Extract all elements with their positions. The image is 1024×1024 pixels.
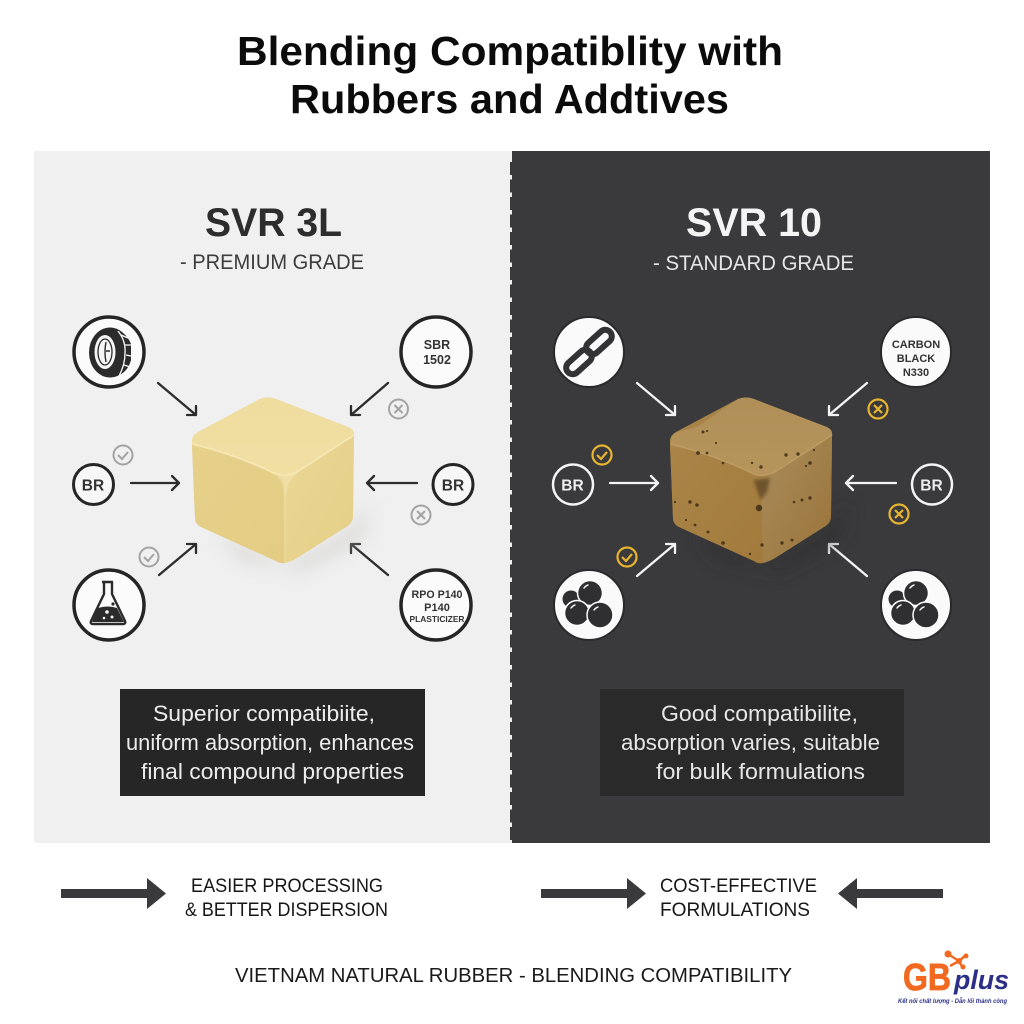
icon: BR circle incompatible: BR [920,478,943,494]
icon: RPO P140 plasticizer: P140 [424,602,450,614]
subheading: standard grade: - STANDARD GRADE [653,252,854,275]
logo: GBplus [898,950,1009,1005]
icon: filler beads right [881,570,951,640]
rubber cube: pale yellow [192,398,372,572]
text box: standard summary: absorption varies, suitable [621,730,880,755]
panel: SVR 3L premium grade [34,151,512,843]
icon: RPO P140 plasticizer: RPO P140 [412,589,462,601]
icon: carbon black N330 [881,317,951,387]
panel: SVR 10 standard grade [512,151,990,843]
icon: BR circle incompatible [912,464,952,504]
text: easier processing: EASIER PROCESSING [191,875,383,897]
text box: standard summary: Good compatibilite, [661,701,858,726]
icon: SBR 1502: 1502 [423,353,451,367]
icon: SBR 1502 [401,317,471,387]
heading: SVR 10: SVR 10 [686,201,822,245]
icon: chain link [554,317,624,387]
logo: GBplus: plus [953,965,1009,995]
icon: tire [74,317,144,387]
text box: premium summary: Superior compatibiite, [153,701,375,726]
title: Rubbers and Addtives [290,76,729,122]
arrow: premium benefit [61,878,166,909]
arrow: pointing left [838,878,943,909]
badge: cross marks [868,400,908,524]
icon: SBR 1502: SBR [424,338,450,352]
icon: RPO P140 plasticizer [401,570,471,640]
icon: RPO P140 plasticizer: PLASTICIZER [410,614,464,624]
text box: standard summary [600,689,904,796]
text box: standard summary: for bulk formulations [656,759,865,784]
icon: BR circle incompatible [433,464,473,504]
heading: SVR 3L: SVR 3L [205,201,342,245]
icon: filler beads left [554,570,624,640]
text: cost-effective: FORMULATIONS [660,899,810,921]
icon: flask [74,570,144,640]
icon: BR circle compatible [74,464,114,504]
text box: premium summary: final compound properties [141,759,404,784]
icon: carbon black N330: BLACK [897,353,935,365]
icon: BR circle compatible: BR [82,478,104,494]
panel divider: dashed line [510,162,513,843]
title: Blending Compatiblity with [237,28,783,74]
logo: GBplus: GB [903,957,951,999]
arrow: standard benefit [541,878,646,909]
subheading: premium grade: - PREMIUM GRADE [180,251,364,274]
text: easier processing [185,875,388,921]
text box: premium summary: uniform absorption, enhances [126,730,414,755]
text: easier processing: & BETTER DISPERSION [185,899,388,921]
footer caption: VIETNAM NATURAL RUBBER - BLENDING COMPATIBILITY [235,964,792,987]
title [237,28,783,122]
icon: carbon black N330: CARBON [892,339,940,351]
badge: check marks [114,446,158,566]
arrows into cube [131,383,417,575]
icon: BR circle compatible: BR [561,478,584,494]
badge: check marks [592,446,636,566]
arrows into cube [610,383,896,576]
rubber cube: speckled brown [670,398,850,572]
icon: carbon black N330: N330 [903,367,929,379]
icon: BR circle incompatible: BR [442,478,464,494]
text: cost-effective [660,875,817,921]
text box: premium summary [120,689,425,796]
badge: cross marks [389,400,430,524]
icon: BR circle compatible [553,464,593,504]
text: cost-effective: COST-EFFECTIVE [660,875,817,897]
logo: GBplus: Kết nối chất lượng - Dẫn lối thành công [898,996,1007,1005]
